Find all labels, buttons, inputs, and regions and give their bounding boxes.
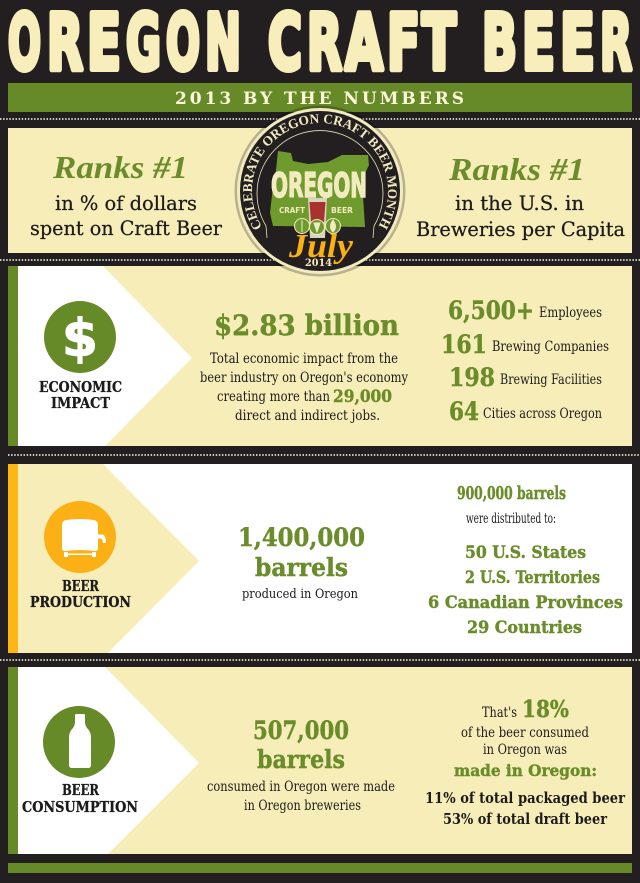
- heading: economic impact: IMPACT: [51, 395, 110, 412]
- share of consumption: [425, 696, 626, 828]
- share of consumption: of the beer consumed: [461, 725, 589, 741]
- share of consumption: 18%: [522, 696, 569, 723]
- icon: dollar: [44, 301, 116, 373]
- headline figure: 1,400,000: [238, 523, 365, 552]
- left ranking: Ranks #1: [52, 149, 188, 185]
- badge: hop icons: [294, 218, 340, 234]
- heading: beer production: BEER: [62, 578, 100, 595]
- heading: beer production: PRODUCTION: [30, 594, 131, 611]
- description: Total economic impact from the: [210, 351, 398, 367]
- headline figure: $2.83 billion: [214, 309, 399, 342]
- panel: rankings: [8, 128, 632, 253]
- title: G: [126, 0, 161, 88]
- title: F: [387, 0, 420, 88]
- description: in Oregon breweries: [244, 798, 361, 814]
- footer bar: [8, 863, 632, 873]
- badge wordmark: CRAFT: [279, 206, 305, 215]
- title: [8, 0, 632, 88]
- description: direct and indirect jobs.: [235, 408, 380, 424]
- share of consumption: in Oregon was: [483, 742, 567, 758]
- title: O: [166, 0, 200, 88]
- left ranking: spent on Craft Beer: [30, 216, 222, 240]
- share of consumption: made in Oregon:: [454, 761, 597, 780]
- subtitle banner: [8, 83, 632, 112]
- heading: beer consumption: [22, 782, 138, 816]
- headline figure: barrels: [255, 553, 348, 582]
- panel: beer production: [8, 464, 632, 653]
- title: A: [345, 0, 383, 88]
- stats list: 6,500+: [448, 296, 534, 325]
- stats list: 161: [441, 330, 487, 359]
- stats list: 198: [449, 363, 495, 392]
- badge: beer glass: [308, 198, 327, 238]
- distribution list: [428, 483, 623, 638]
- icon: bottle: [43, 706, 115, 778]
- stats list: [441, 296, 609, 426]
- title: E: [560, 0, 595, 88]
- distribution list: 50 U.S. States: [465, 543, 586, 563]
- stats list: 64: [449, 397, 479, 426]
- headline figure: [253, 716, 349, 774]
- distribution list: were distributed to:: [466, 511, 556, 527]
- right ranking: Ranks #1: [448, 151, 585, 187]
- description: [207, 779, 395, 814]
- left ranking: in % of dollars: [55, 191, 197, 215]
- share of consumption: That's: [482, 705, 517, 721]
- badge wordmark: OREGON: [271, 166, 367, 206]
- title: E: [522, 0, 555, 88]
- title: R: [47, 0, 83, 88]
- description: 29,000: [333, 387, 392, 407]
- description: creating more than: [217, 389, 330, 405]
- title: R: [307, 0, 342, 88]
- panel: economic impact: [8, 266, 632, 446]
- right ranking: Breweries per Capita: [416, 217, 625, 241]
- heading: economic impact: [39, 379, 122, 412]
- stats list: Brewing Facilities: [500, 372, 602, 388]
- badge: celebrate Oregon craft beer month: [234, 106, 406, 276]
- stats list: Employees: [539, 305, 602, 321]
- heading: beer consumption: BEER: [62, 782, 100, 799]
- badge: Oregon state shape: [270, 151, 369, 227]
- description: [200, 351, 408, 424]
- headline figure: [238, 523, 365, 582]
- right ranking: in the U.S. in: [455, 191, 584, 215]
- distribution list: 2 U.S. Territories: [465, 568, 600, 588]
- headline figure: 507,000: [253, 716, 349, 745]
- distribution list: 29 Countries: [467, 618, 582, 638]
- heading: beer production: [30, 578, 131, 611]
- heading: beer consumption: CONSUMPTION: [22, 799, 138, 816]
- description: beer industry on Oregon's economy: [200, 370, 408, 386]
- stats list: Brewing Companies: [492, 339, 609, 355]
- title: O: [8, 0, 41, 88]
- badge: 2014: 2014: [305, 258, 332, 269]
- badge wordmark: BEER: [331, 206, 353, 215]
- stats list: Cities across Oregon: [483, 406, 602, 422]
- share of consumption: 53% of total draft beer: [443, 810, 608, 828]
- panel: beer consumption: [8, 667, 632, 854]
- description: consumed in Oregon were made: [207, 779, 395, 795]
- title: E: [87, 0, 121, 88]
- right ranking: [416, 151, 625, 241]
- description: produced in Oregon: [242, 587, 359, 602]
- icon: barrel: [44, 501, 116, 573]
- badge: July: July: [288, 228, 354, 265]
- title: B: [482, 0, 517, 88]
- heading: economic impact: ECONOMIC: [39, 379, 122, 396]
- distribution list: 6 Canadian Provinces: [428, 593, 623, 613]
- left ranking: [30, 149, 222, 240]
- distribution list: 900,000 barrels: [457, 483, 566, 504]
- title: C: [268, 0, 302, 88]
- title: N: [205, 0, 241, 88]
- title: T: [422, 0, 456, 88]
- subtitle banner: 2013 BY THE NUMBERS: [175, 89, 464, 109]
- badge ring text: CELEBRATE OREGON CRAFT BEER MONTH: [243, 114, 397, 230]
- icon: dollar: $: [62, 309, 98, 369]
- headline figure: barrels: [257, 745, 345, 774]
- badge wordmark: [271, 166, 367, 215]
